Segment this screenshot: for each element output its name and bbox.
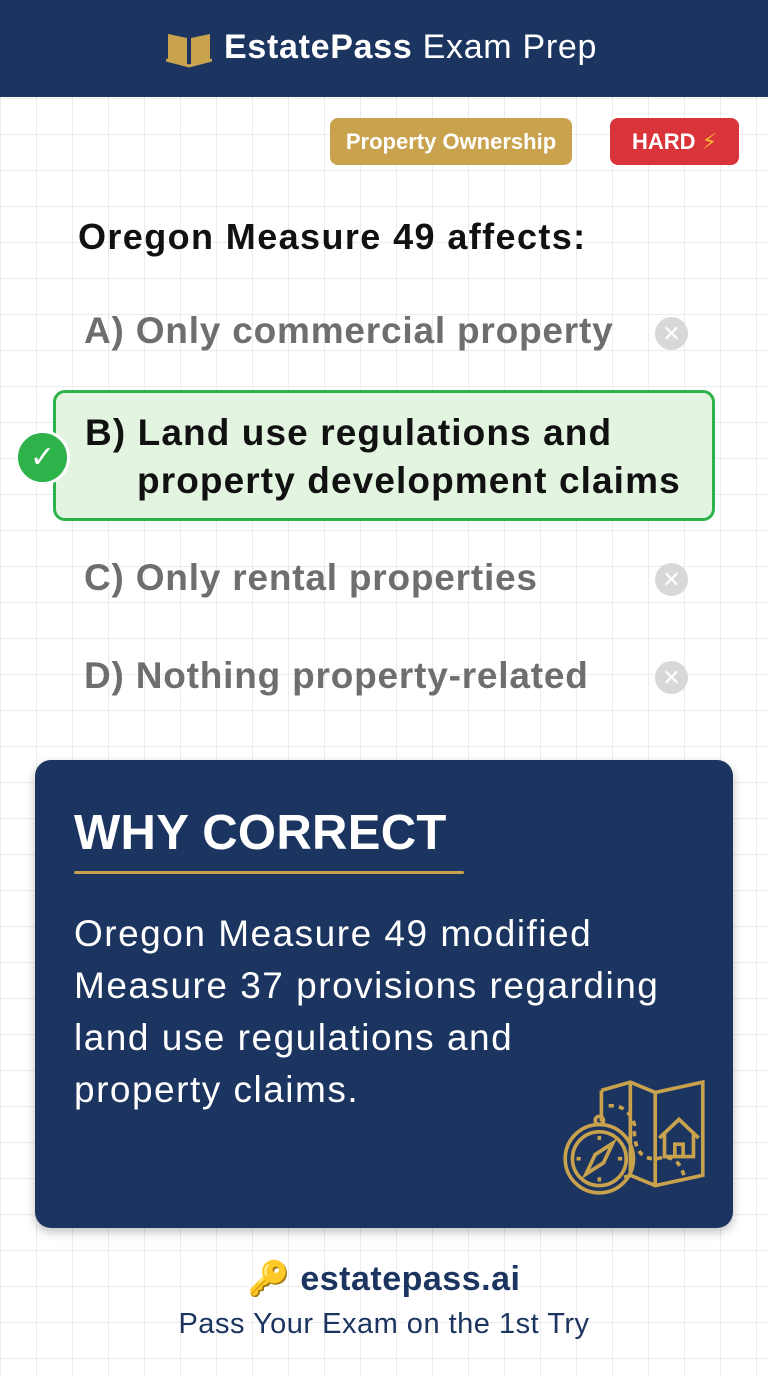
icon: x A: ✕ [662,321,681,346]
option B text [85,412,681,501]
question: Oregon Measure 49 affects: [78,216,587,257]
title: EstatePass Exam Prep [224,28,597,66]
option D: D) Nothing property-related [84,655,589,696]
icon: x C: ✕ [662,567,681,592]
footer brand: 🔑 estatepass.ai [248,1260,520,1298]
icon: x D: ✕ [662,665,681,690]
option C: C) Only rental properties [84,557,538,598]
option A: A) Only commercial property [84,310,613,351]
gold underline [74,871,464,874]
panel heading: WHY CORRECT [74,806,447,860]
explanation text: land use regulations and [74,1017,513,1058]
footer tagline: Pass Your Exam on the 1st Try [178,1308,590,1340]
icon: x C [655,563,688,596]
badge: category: Property Ownership [346,129,556,154]
option B text: B) Land use regulations and [85,412,612,453]
option B text: property development claims [137,460,681,501]
icon: check: ✓ [30,441,55,474]
badge: difficulty: HARD ⚡ [632,129,717,154]
option B correct [53,390,715,521]
panel: why correct [35,760,733,1228]
explanation text: property claims. [74,1069,359,1110]
header bar [0,0,768,97]
icon: x A [655,317,688,350]
icon: book [166,34,212,68]
explanation text: Oregon Measure 49 modified [74,913,592,954]
badge: difficulty [610,118,739,165]
explanation text [74,913,659,1110]
icon: map and compass [563,1080,705,1195]
explanation text: Measure 37 provisions regarding [74,965,659,1006]
badge: category [330,118,572,165]
icon: x D [655,661,688,694]
icon: check [15,430,70,485]
